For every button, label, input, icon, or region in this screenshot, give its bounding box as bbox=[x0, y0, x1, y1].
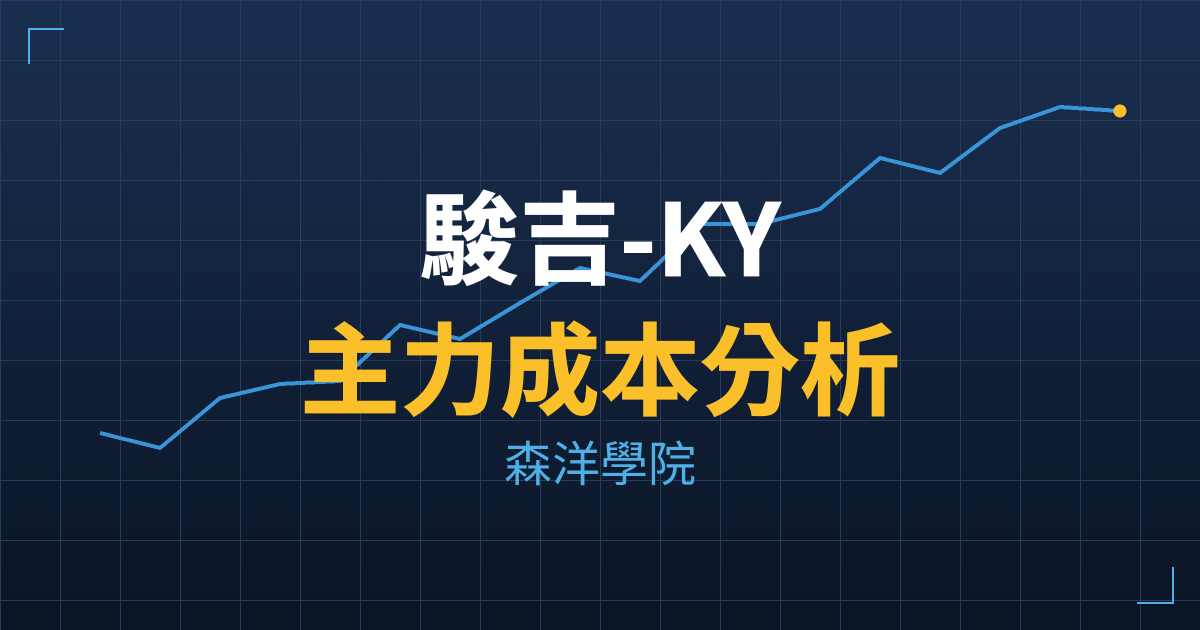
brand name: 森洋學院 bbox=[504, 425, 696, 495]
corner bracket: bottom right bbox=[1137, 567, 1173, 603]
subtitle: 主力成本分析 bbox=[300, 291, 900, 436]
title: 駿吉-KY bbox=[420, 160, 780, 305]
corner bracket: top left bbox=[29, 29, 64, 64]
line chart bbox=[100, 104, 1126, 448]
